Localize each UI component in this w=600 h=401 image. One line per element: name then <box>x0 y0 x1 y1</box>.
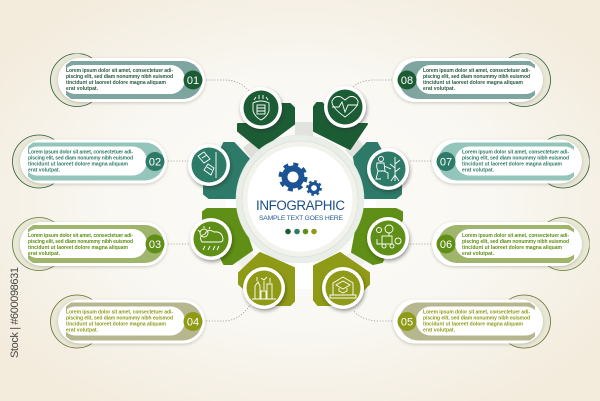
central wheel <box>203 103 402 305</box>
card 04: tincidunt ut laoreet dolore magna aliquam <box>66 322 167 328</box>
card 01: piscing elit, sed diam nonummy nibh euismod <box>66 74 173 80</box>
spokes <box>226 122 376 289</box>
title: INFOGRAPHIC <box>256 198 345 213</box>
card 01: Lorem ipsum dolor sit amet, consectetuer adi- <box>66 68 173 74</box>
icon 06: logistics <box>367 217 409 259</box>
icon 05: laptop with graduation cap <box>322 267 364 309</box>
card 06: Lorem ipsum dolor sit amet, consectetuer adi- <box>462 233 569 239</box>
card 06 <box>432 218 590 270</box>
card 08: tincidunt ut laoreet dolore magna aliquam <box>423 80 524 86</box>
card 08 <box>393 54 550 106</box>
card 01: erat volutpat. <box>66 86 99 92</box>
card 05: erat volutpat. <box>423 328 456 334</box>
card 04: 04 <box>187 316 199 328</box>
card 03: erat volutpat. <box>28 251 61 257</box>
card 08: piscing elit, sed diam nonummy nibh euismod <box>423 74 530 80</box>
dotted connectors <box>168 80 431 321</box>
card 05: Lorem ipsum dolor sit amet, consectetuer adi- <box>423 310 530 316</box>
petal 06 green <box>352 209 402 264</box>
card 02: tincidunt ut laoreet dolore magna aliquam <box>28 162 129 168</box>
center disc <box>248 146 352 252</box>
card 03: tincidunt ut laoreet dolore magna aliquam <box>28 245 129 251</box>
card 02 <box>12 135 167 188</box>
icon: gears <box>280 164 321 195</box>
palette dots <box>285 229 317 234</box>
card 06: erat volutpat. <box>462 251 495 257</box>
card 03: piscing elit, sed diam nonummy nibh euismod <box>28 239 133 245</box>
card 03 <box>12 218 167 270</box>
icon 07: person with plant <box>367 148 409 190</box>
card 02: 02 <box>149 156 161 168</box>
card 06: tincidunt ut laoreet dolore magna aliquam <box>462 245 563 251</box>
card 02: piscing elit, sed diam nonummy nibh euismod <box>28 156 133 162</box>
icon 08: heart pulse <box>324 86 366 128</box>
card 06: 06 <box>440 239 452 251</box>
card 04: erat volutpat. <box>66 328 99 334</box>
card 07: erat volutpat. <box>462 168 495 174</box>
outer ring <box>236 135 364 263</box>
card 05: piscing elit, sed diam nonummy nibh euismod <box>423 316 530 322</box>
card 02: Lorem ipsum dolor sit amet, consectetuer adi- <box>28 150 133 156</box>
icon 02: tools <box>188 144 230 186</box>
card 08: erat volutpat. <box>423 86 456 92</box>
card 06: piscing elit, sed diam nonummy nibh euismod <box>462 239 569 245</box>
inner ring <box>242 141 358 257</box>
card 01: 01 <box>187 75 199 87</box>
card 07: piscing elit, sed diam nonummy nibh euismod <box>462 156 569 162</box>
card 07: tincidunt ut laoreet dolore magna aliquam <box>462 162 563 168</box>
card 02: erat volutpat. <box>28 168 61 174</box>
petal 05 olive <box>314 253 369 305</box>
petal 01 dark green <box>238 104 294 149</box>
card 07 <box>432 135 590 188</box>
petal 03 green <box>203 209 252 264</box>
card 07: 07 <box>440 156 452 168</box>
card 08: Lorem ipsum dolor sit amet, consectetuer adi- <box>423 68 530 74</box>
card 01 <box>50 54 205 106</box>
petal 02 teal <box>204 143 250 198</box>
icon 04: city chart <box>243 267 285 309</box>
icon 03: cloud and rain <box>190 218 232 260</box>
card 05 <box>393 295 550 348</box>
petal 08 dark green <box>314 103 367 149</box>
card 05: 05 <box>401 316 413 328</box>
card 04: piscing elit, sed diam nonummy nibh euismod <box>66 316 173 322</box>
vertical stock id: Stock | #600098631 <box>9 267 21 358</box>
card 04: Lorem ipsum dolor sit amet, consectetuer adi- <box>66 310 173 316</box>
icon 01: shield with data <box>240 87 282 129</box>
subtitle: SAMPLE TEXT GOES HERE <box>259 215 343 222</box>
card 03: Lorem ipsum dolor sit amet, consectetuer adi- <box>28 233 133 239</box>
card 08: 08 <box>401 75 413 87</box>
petal 07 teal <box>354 143 401 198</box>
card 07: Lorem ipsum dolor sit amet, consectetuer adi- <box>462 150 569 156</box>
petal 04 olive <box>239 253 294 305</box>
card 05: tincidunt ut laoreet dolore magna aliquam <box>423 322 524 328</box>
card 04 <box>50 295 205 348</box>
card 01: tincidunt ut laoreet dolore magna aliquam <box>66 80 167 86</box>
card 03: 03 <box>149 239 161 251</box>
